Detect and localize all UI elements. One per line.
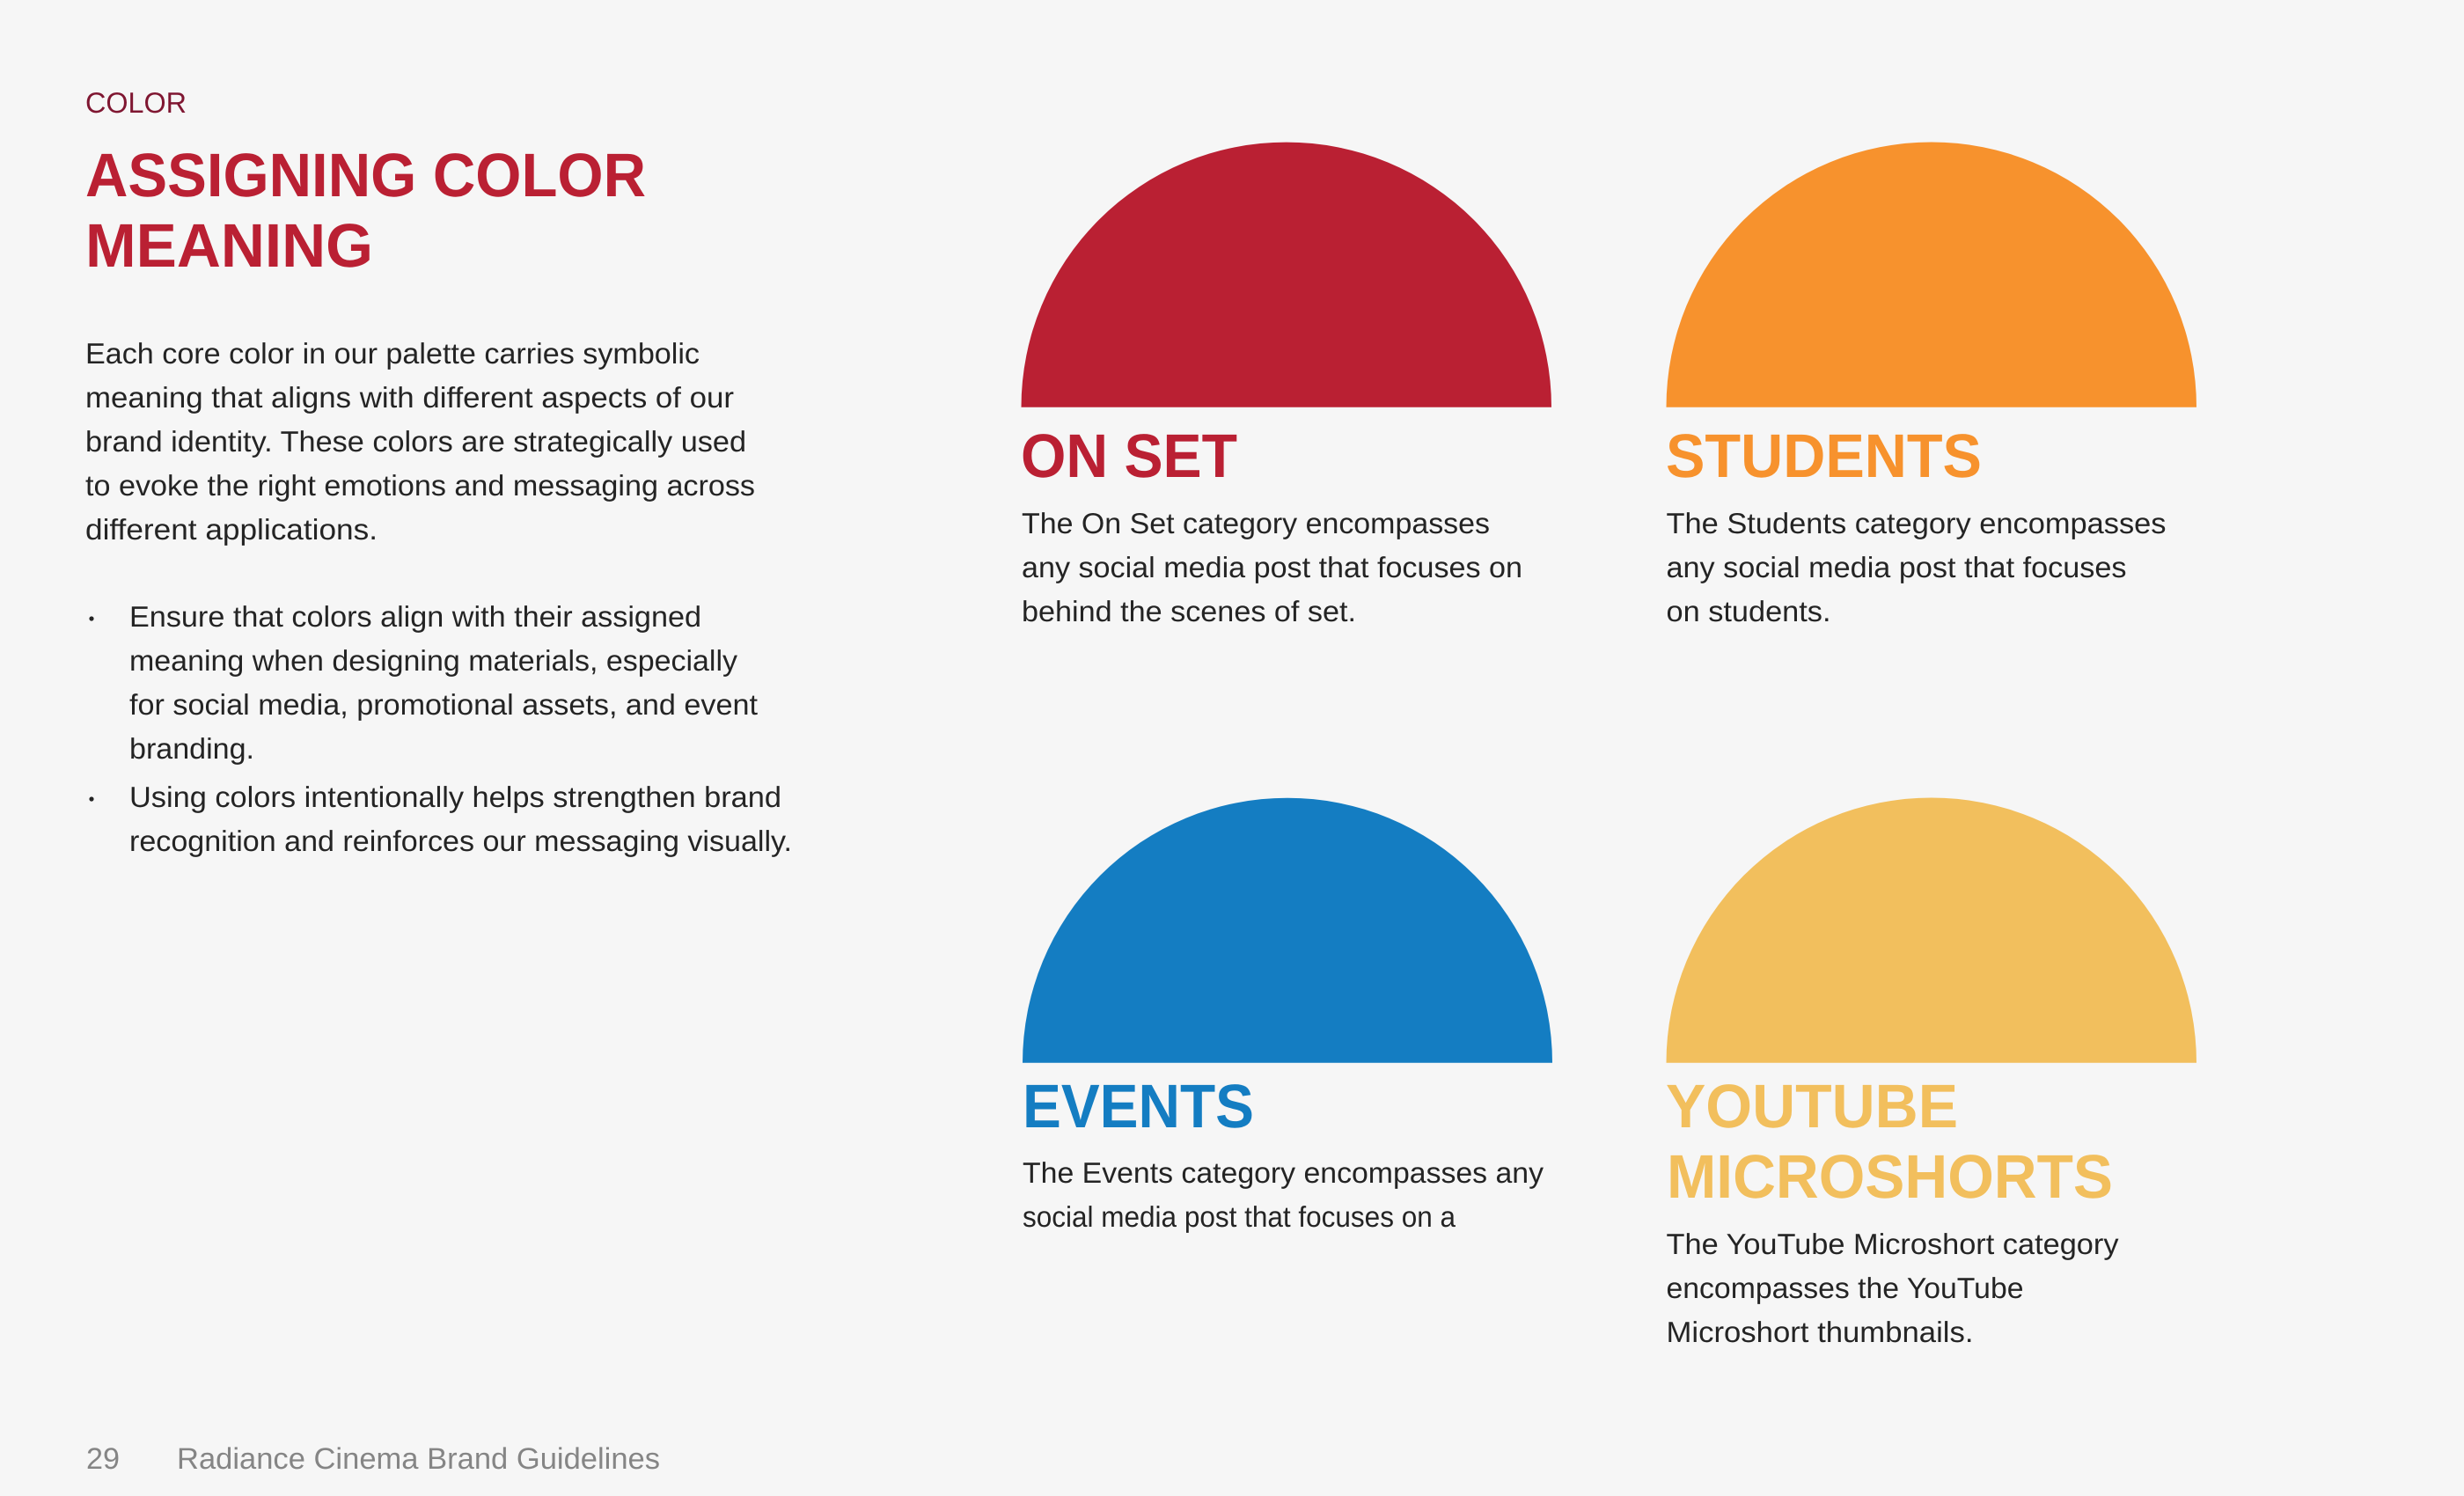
bullet list: Ensure that colors align with their assigned <box>129 600 701 633</box>
heading: youtube microshorts: YOUTUBE <box>1666 1072 1958 1140</box>
description: students: The Students category encompasses <box>1667 507 2167 539</box>
title: MEANING <box>85 211 373 280</box>
description: youtube microshorts: The YouTube Microshort category <box>1667 1228 2119 1260</box>
panel: students <box>1666 142 2196 627</box>
description: youtube microshorts <box>1667 1228 2119 1348</box>
footer: 29 <box>86 1442 120 1476</box>
panel: events <box>1023 798 1552 1233</box>
heading: on set: ON SET <box>1021 422 1237 490</box>
intro text block <box>85 337 755 546</box>
heading: events: EVENTS <box>1023 1072 1254 1140</box>
intro text block: Each core color in our palette carries symbolic <box>85 337 700 370</box>
description: events <box>1023 1156 1544 1233</box>
panel: youtube microshorts <box>1666 797 2196 1348</box>
intro text block: different applications. <box>85 513 378 546</box>
intro text block: to evoke the right emotions and messaging across <box>85 469 755 502</box>
icon: yellow semicircle <box>1667 797 2196 1063</box>
bullet list: Using colors intentionally helps strengthen brand <box>129 781 781 813</box>
description: students: any social media post that focuses <box>1667 551 2126 583</box>
title: ASSIGNING COLOR <box>85 141 646 209</box>
title <box>85 141 646 280</box>
description: students <box>1667 507 2167 627</box>
description: youtube microshorts: Microshort thumbnails. <box>1667 1316 1973 1348</box>
icon: orange semicircle <box>1667 142 2196 407</box>
panel: on set <box>1021 143 1551 627</box>
description: on set: any social media post that focuses on <box>1022 551 1522 583</box>
footer: Radiance Cinema Brand Guidelines <box>177 1442 660 1476</box>
heading: students: STUDENTS <box>1666 422 1982 490</box>
description: on set <box>1022 507 1522 627</box>
description: events: social media post that focuses on a <box>1023 1200 1456 1233</box>
heading: youtube microshorts: MICROSHORTS <box>1667 1142 2113 1211</box>
heading: youtube microshorts <box>1666 1072 2113 1211</box>
icon: red semicircle <box>1021 143 1551 407</box>
description: on set: The On Set category encompasses <box>1022 507 1490 539</box>
bullet list: meaning when designing materials, especially <box>129 644 737 677</box>
bullet list <box>89 600 792 857</box>
bullet list: for social media, promotional assets, and event <box>129 688 758 721</box>
section label: COLOR <box>85 86 187 119</box>
bullet list: recognition and reinforces our messaging visually. <box>129 825 792 857</box>
icon: blue semicircle <box>1023 798 1552 1063</box>
description: on set: behind the scenes of set. <box>1022 595 1356 627</box>
description: events: The Events category encompasses any <box>1023 1156 1544 1189</box>
intro text block: brand identity. These colors are strategically used <box>85 425 746 458</box>
bullet list: branding. <box>129 732 254 765</box>
description: students: on students. <box>1667 595 1830 627</box>
description: youtube microshorts: encompasses the YouTube <box>1667 1272 2024 1304</box>
intro text block: meaning that aligns with different aspects of our <box>85 381 734 414</box>
